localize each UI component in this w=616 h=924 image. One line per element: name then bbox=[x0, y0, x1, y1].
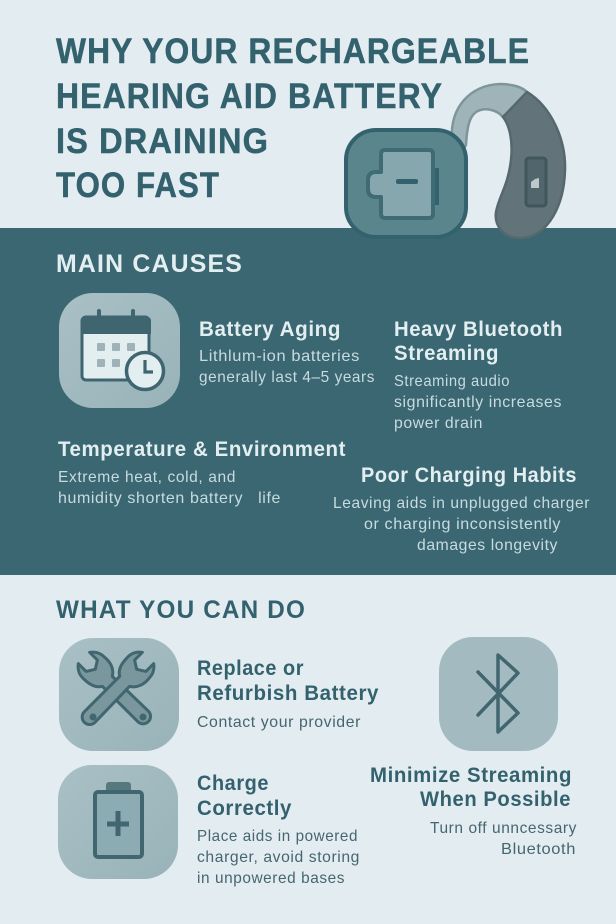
icon: calendar and clock bbox=[59, 293, 180, 408]
cause: temperature and environment: Temperature & Environment bbox=[58, 438, 346, 461]
cause: poor charging habits: Leaving aids in unplugged charger bbox=[333, 495, 590, 512]
action: charge correctly: Correctly bbox=[197, 797, 292, 820]
icon: battery tile bbox=[346, 130, 466, 237]
icon: hearing aid bbox=[452, 84, 565, 238]
cause: temperature and environment bbox=[58, 438, 346, 507]
cause: heavy bluetooth streaming bbox=[394, 318, 563, 432]
cause: poor charging habits: or charging inconsistently bbox=[364, 516, 561, 533]
action: minimize streaming: Bluetooth bbox=[501, 841, 576, 858]
action: minimize streaming bbox=[370, 764, 577, 858]
action: charge correctly bbox=[197, 772, 360, 887]
title: IS DRAINING bbox=[56, 122, 269, 161]
title: WHY YOUR RECHARGEABLE bbox=[56, 32, 530, 71]
cause: heavy bluetooth streaming: power drain bbox=[394, 415, 483, 432]
cause: temperature and environment: Extreme heat, cold, and bbox=[58, 469, 236, 486]
cause: poor charging habits: Poor Charging Habits bbox=[361, 464, 577, 487]
action: replace or refurbish battery: Refurbish Battery bbox=[197, 682, 379, 705]
title: HEARING AID BATTERY bbox=[56, 77, 443, 116]
cause: battery aging bbox=[199, 318, 375, 386]
action: minimize streaming: Minimize Streaming bbox=[370, 764, 572, 787]
cause: heavy bluetooth streaming: Streaming audio bbox=[394, 373, 510, 390]
title bbox=[56, 32, 530, 205]
action: minimize streaming: Turn off unncessary bbox=[430, 820, 577, 837]
action: minimize streaming: When Possible bbox=[420, 788, 571, 811]
cause: battery aging: Lithlum-ion batteries bbox=[199, 348, 360, 365]
cause: battery aging: generally last 4–5 years bbox=[199, 369, 375, 386]
cause: poor charging habits: damages longevity bbox=[417, 537, 558, 554]
action: replace or refurbish battery bbox=[197, 657, 379, 731]
cause: battery aging: Battery Aging bbox=[199, 318, 341, 341]
action: replace or refurbish battery: Replace or bbox=[197, 657, 304, 680]
action: charge correctly: Place aids in powered bbox=[197, 828, 358, 845]
cause: poor charging habits bbox=[333, 464, 590, 554]
heading: main causes: MAIN CAUSES bbox=[56, 250, 243, 278]
icon: bluetooth bbox=[439, 637, 558, 751]
cause: heavy bluetooth streaming: significantly increases bbox=[394, 394, 562, 411]
action: charge correctly: in unpowered bases bbox=[197, 870, 345, 887]
icon: battery with plus bbox=[58, 765, 178, 879]
heading: what you can do: WHAT YOU CAN DO bbox=[56, 596, 306, 624]
action: replace or refurbish battery: Contact your provider bbox=[197, 714, 361, 731]
title: TOO FAST bbox=[56, 166, 220, 205]
panel: main causes band bbox=[0, 228, 616, 575]
icon: crossed wrenches bbox=[59, 638, 179, 751]
action: charge correctly: Charge bbox=[197, 772, 269, 795]
cause: temperature and environment: humidity shorten battery life bbox=[58, 490, 281, 507]
cause: heavy bluetooth streaming: Streaming bbox=[394, 342, 499, 365]
action: charge correctly: charger, avoid storing bbox=[197, 849, 360, 866]
cause: heavy bluetooth streaming: Heavy Bluetooth bbox=[394, 318, 563, 341]
